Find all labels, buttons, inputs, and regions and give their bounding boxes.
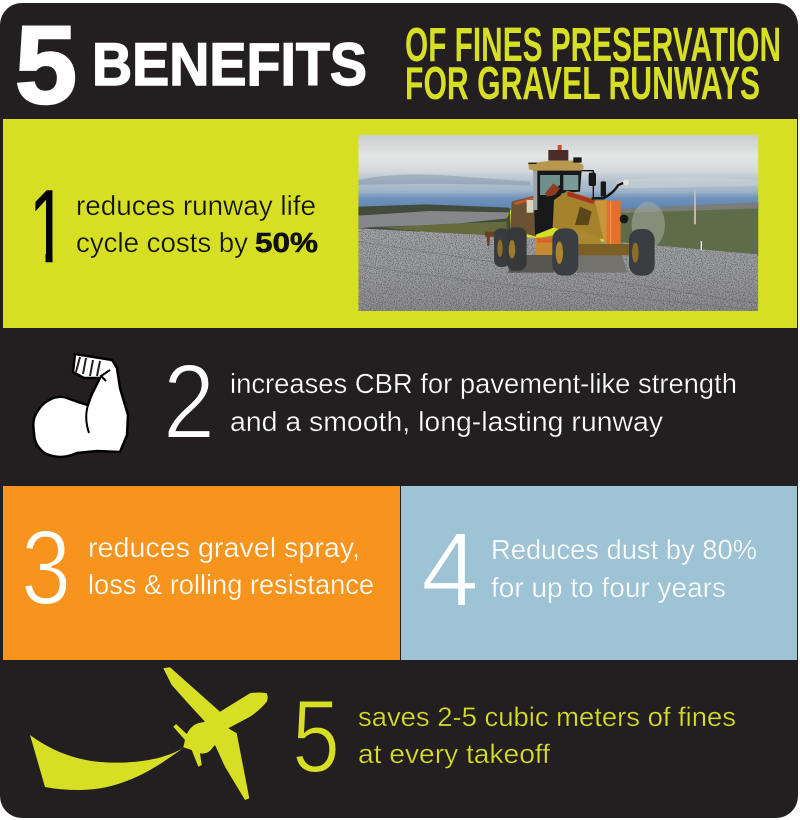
benefit 4 text: Reduces dust by 80%	[491, 534, 757, 565]
number 2: 2	[163, 343, 215, 461]
title numeral 5: 5	[15, 4, 77, 127]
benefit 2 text: increases CBR for pavement-like strength	[230, 368, 737, 399]
icon: airplane with swoosh trail	[30, 667, 268, 800]
number 4: 4	[421, 511, 479, 629]
benefit 5 text	[358, 702, 736, 769]
number 1: 1	[29, 169, 67, 285]
orange plate	[606, 200, 621, 244]
benefit 1 text	[76, 190, 318, 258]
blade	[508, 255, 554, 273]
panel: benefit 4	[401, 486, 797, 660]
panel: benefit 5	[30, 667, 736, 800]
benefit 1 text: cycle costs by	[76, 227, 248, 258]
photo: motor grader on gravel runway	[358, 135, 762, 311]
axle	[578, 244, 635, 255]
hood and engine	[553, 191, 608, 240]
title	[15, 4, 781, 127]
benefit 2 text	[230, 368, 737, 437]
panel: benefit 1	[3, 119, 797, 328]
cab	[533, 170, 582, 235]
rear frame	[485, 232, 495, 246]
benefit 1 text: 50%	[255, 227, 318, 258]
tyres	[494, 228, 509, 267]
number 5: 5	[292, 679, 340, 795]
panel: benefit 2	[33, 343, 737, 461]
benefit 5 text: saves 2-5 cubic meters of fines	[358, 702, 736, 732]
icon: flexed bicep	[33, 354, 128, 457]
mirrors	[592, 183, 624, 198]
benefit 4 text	[491, 534, 757, 603]
lower frame	[540, 234, 602, 254]
benefit 3 text	[88, 532, 374, 600]
benefit 4 text: for up to four years	[491, 572, 726, 603]
number 3: 3	[21, 509, 71, 627]
benefit 2 text: and a smooth, long-lasting runway	[230, 406, 663, 437]
grader	[485, 145, 655, 276]
title word BENEFITS: BENEFITS	[92, 31, 367, 98]
beacon	[548, 150, 568, 161]
benefit 3 text: loss & rolling resistance	[88, 569, 374, 600]
panel: benefit 3	[3, 486, 400, 660]
benefit 3 text: reduces gravel spray,	[88, 532, 360, 563]
benefit 5 text: at every takeoff	[358, 739, 551, 769]
benefit 1 text: reduces runway life	[76, 190, 316, 221]
